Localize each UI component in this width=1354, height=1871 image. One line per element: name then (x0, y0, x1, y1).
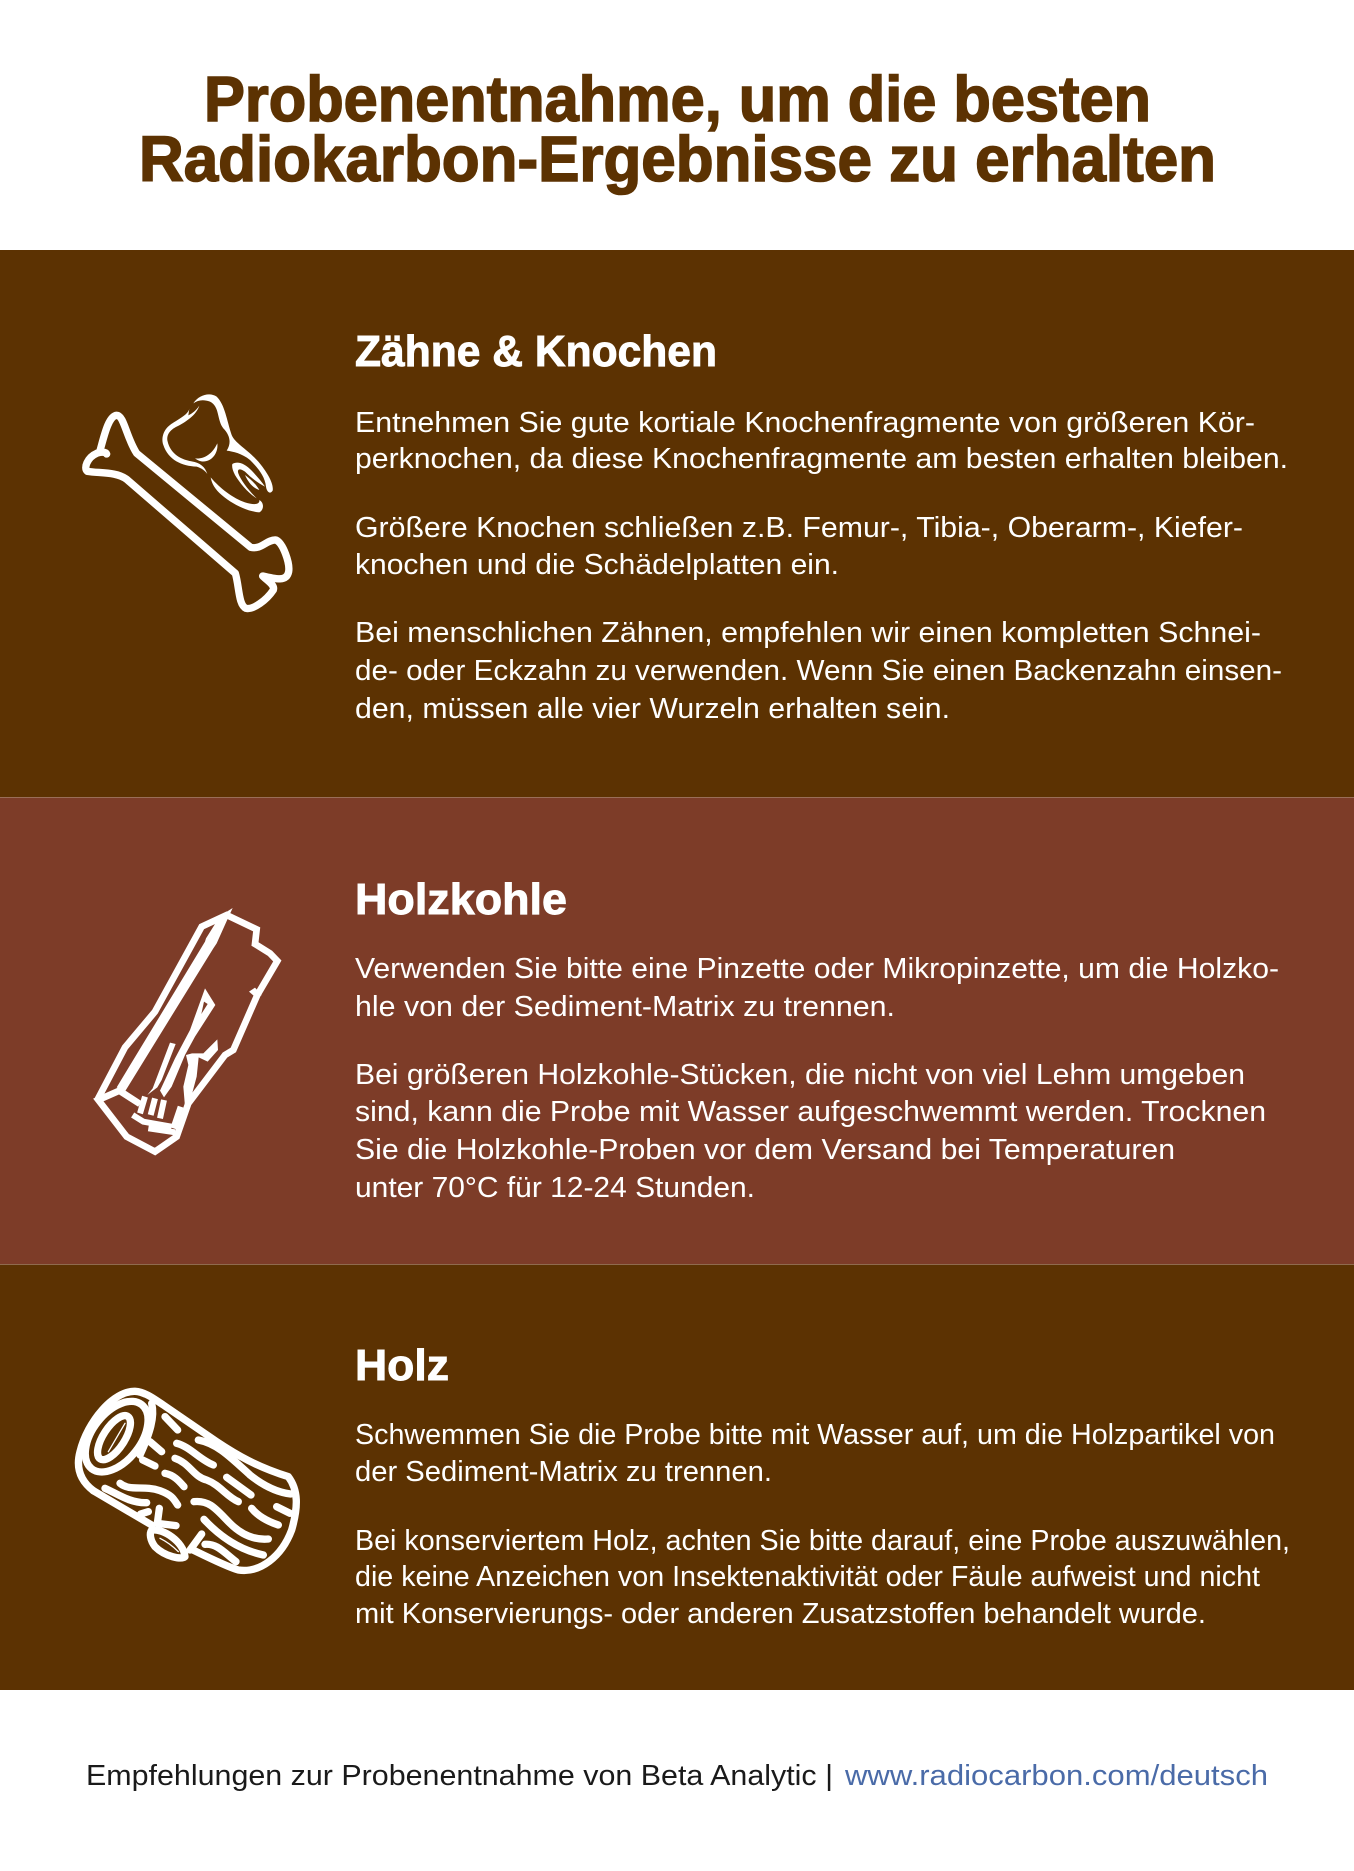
icon: bone and tooth (86, 394, 289, 609)
title (139, 63, 1216, 195)
text block: Zähne & Knochen: perknochen, da diese Knochenfragmente am besten erhalten bleiben. (355, 443, 1288, 475)
heading: Holz: Holz (355, 1341, 449, 1390)
footer (86, 1760, 1268, 1792)
text block: Zähne & Knochen: den, müssen alle vier Wurzeln erhalten sein. (355, 693, 950, 725)
footer: Empfehlungen zur Probenentnahme von Beta Analytic | (86, 1760, 833, 1792)
title: Radiokarbon-Ergebnisse zu erhalten (139, 123, 1216, 195)
heading: Holzkohle: Holzkohle (355, 875, 567, 924)
text block: Zähne & Knochen: de- oder Eckzahn zu verwenden. Wenn Sie einen Backenzahn einsen- (355, 655, 1282, 687)
text block: Holzkohle: unter 70°C für 12-24 Stunden. (355, 1172, 755, 1204)
text block: Holz: Schwemmen Sie die Probe bitte mit Wasser auf, um die Holzpartikel von (355, 1419, 1275, 1451)
panel: Holzkohle (0, 797, 1354, 1265)
text block: Zähne & Knochen: knochen und die Schädelplatten ein. (355, 549, 839, 581)
text block: Holzkohle: Verwenden Sie bitte eine Pinzette oder Mikropinzette, um die Holzko- (355, 953, 1279, 985)
icon: wood log (73, 1390, 296, 1570)
text block: Holz: der Sediment-Matrix zu trennen. (355, 1456, 772, 1488)
footer: www.radiocarbon.com/deutsch (844, 1760, 1268, 1792)
heading: Zähne & Knochen: Zähne & Knochen (355, 327, 717, 376)
panel: Zähne & Knochen (0, 250, 1354, 797)
text block: Holzkohle: sind, kann die Probe mit Wasser aufgeschwemmt werden. Trocknen (355, 1096, 1266, 1128)
text block: Holz (355, 1419, 1290, 1630)
text block: Zähne & Knochen: Größere Knochen schließen z.B. Femur-, Tibia-, Oberarm-, Kiefer- (355, 512, 1243, 544)
text block: Holzkohle: Sie die Holzkohle-Proben vor dem Versand bei Temperaturen (355, 1134, 1175, 1166)
title: Probenentnahme, um die besten (204, 63, 1151, 135)
text block: Holz: Bei konserviertem Holz, achten Sie bitte darauf, eine Probe auszuwählen, (355, 1525, 1290, 1557)
text block: Holzkohle: Bei größeren Holzkohle-Stücken, die nicht von viel Lehm umgeben (355, 1059, 1245, 1091)
text block: Holzkohle (355, 953, 1279, 1204)
text block: Holz: die keine Anzeichen von Insektenaktivität oder Fäule aufweist und nicht (355, 1561, 1260, 1593)
text block: Zähne & Knochen: Bei menschlichen Zähnen, empfehlen wir einen kompletten Schnei- (355, 617, 1261, 649)
text block: Holz: mit Konservierungs- oder anderen Zusatzstoffen behandelt wurde. (355, 1598, 1206, 1630)
text block: Zähne & Knochen (355, 407, 1288, 725)
text block: Holzkohle: hle von der Sediment-Matrix zu trennen. (355, 991, 895, 1023)
panel: Holz (0, 1265, 1354, 1690)
icon: charcoal (97, 908, 277, 1152)
text block: Zähne & Knochen: Entnehmen Sie gute kortiale Knochenfragmente von größeren Kör- (355, 407, 1255, 439)
